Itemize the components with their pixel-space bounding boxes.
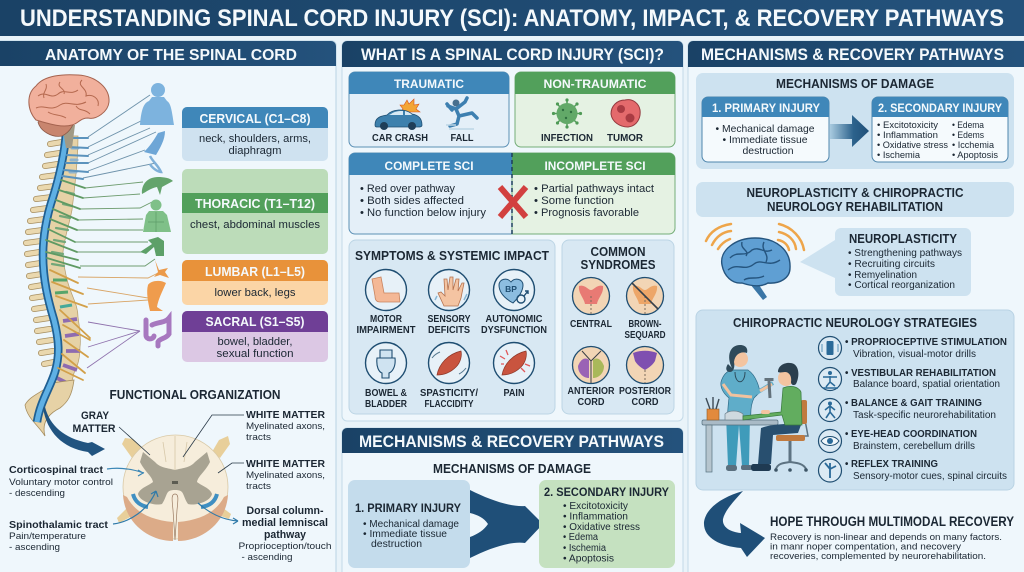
icon: shoulder, thoracic	[140, 237, 164, 256]
illustration: clinician and patient	[702, 345, 808, 472]
box: neuroplasticity and chiropractic neurology rehabilitation	[696, 182, 1014, 217]
icon: body, cervical	[140, 83, 174, 125]
list: complete SCI: • No function below injury	[360, 207, 486, 219]
box: symptoms and systemic impact: BLADDER	[365, 399, 408, 410]
subheading: mechanisms of damage: MECHANISMS OF DAMAGE	[433, 462, 591, 476]
card: secondary injury: • Edema	[563, 532, 598, 543]
card: secondary injury: • Icchemia	[952, 140, 995, 151]
sacrum	[25, 380, 74, 436]
icon: car crash	[375, 99, 422, 130]
box: cervical: diaphragm	[228, 145, 282, 157]
lower tan lobes	[123, 495, 173, 541]
card: primary injury: • Immediate tissue	[722, 134, 808, 146]
box: symptoms and systemic impact: AUTONOMIC	[486, 314, 542, 325]
box: sacral: bowel, bladder,	[218, 336, 292, 348]
box: thoracic: chest, abdominal muscles	[190, 219, 321, 231]
label: dorsal column-medial lemniscal pathway: Proprioception/touch	[238, 541, 332, 552]
label: dorsal column-medial lemniscal pathway: medial lemniscal	[242, 517, 328, 529]
card: primary injury: • Immediate tissue	[363, 529, 447, 540]
list: incomplete SCI	[534, 183, 654, 219]
desk	[702, 420, 778, 472]
gray matter	[138, 452, 212, 505]
card: non-traumatic: NON-TRAUMATIC	[544, 77, 647, 91]
card: primary injury: destruction	[371, 539, 422, 550]
reflex hammer	[764, 380, 774, 398]
list: complete SCI: • Both sides affected	[360, 195, 464, 207]
card: secondary injury	[872, 97, 1008, 162]
box: common syndromes: POSTERIOR	[619, 386, 672, 397]
icon: colon, sacral	[146, 318, 169, 346]
box: symptoms and systemic impact	[349, 240, 555, 414]
box: common syndromes: COMMON	[590, 245, 646, 259]
colored discs	[70, 148, 78, 172]
box: mechanisms of damage	[696, 73, 1014, 169]
box: common syndromes: BROWN-	[628, 319, 662, 330]
box: chiropractic neurology strategies	[696, 310, 1014, 490]
icon: blue brain	[722, 238, 790, 300]
card: secondary injury: • Apoptosis	[563, 554, 614, 564]
icon: red X	[500, 187, 526, 217]
icon: leg, lumbar	[147, 281, 166, 311]
model on desk	[725, 411, 743, 420]
box: symptoms and systemic impact: FLACCIDITY	[424, 399, 474, 410]
box: symptoms and systemic impact: BOWEL &	[365, 388, 407, 399]
icon: autonomic dysfunction: BP	[505, 284, 517, 294]
icon: sensory deficits	[428, 270, 470, 310]
brain	[29, 75, 109, 148]
heading: what is SCI	[342, 41, 683, 67]
arrow: spine to cross-section	[43, 407, 105, 456]
card: traumatic: TRAUMATIC	[394, 77, 464, 91]
icon: autonomic dysfunction	[494, 270, 534, 310]
panel: what is a spinal cord injury	[342, 41, 683, 421]
box: mechanisms of damage: MECHANISMS OF DAMAGE	[776, 77, 934, 91]
card: primary injury: destruction	[742, 145, 794, 157]
icon: pain	[494, 342, 534, 384]
label: corticospinal tract: Corticospinal tract	[9, 464, 103, 476]
patient	[743, 363, 802, 471]
label: white matter, lower: Myelinated axons,	[246, 470, 325, 481]
card: secondary injury: • Inflammation	[877, 130, 938, 141]
icon: hip, lumbar	[154, 260, 169, 278]
box: common syndromes: ANTERIOR	[568, 386, 615, 397]
spinous processes	[26, 142, 62, 364]
box: common syndromes: CENTRAL	[570, 319, 612, 330]
text: hope through multimodal recovery: in manr noper compentation, and necovery	[770, 542, 961, 552]
label: white matter, lower: WHITE MATTER	[246, 458, 325, 470]
callout: neuroplasticity: • Strengthening pathways	[848, 248, 962, 259]
box: symptoms and systemic impact: SPASTICITY/	[420, 388, 478, 399]
box: lumbar	[182, 260, 328, 305]
card: complete vs incomplete SCI	[349, 153, 675, 234]
spinal cord	[37, 133, 66, 422]
callout: neuroplasticity: • Cortical reorganization	[848, 280, 955, 291]
label: dorsal column-medial lemniscal pathway: Dorsal column-	[246, 505, 324, 517]
list: complete SCI	[360, 183, 486, 219]
label: spinothalamic tract	[9, 519, 108, 553]
callout: neuroplasticity: • Remyelination	[848, 270, 917, 281]
strategy: eye-head coordination	[818, 428, 977, 452]
box: sacral: sexual function	[216, 348, 294, 360]
box: symptoms and systemic impact: PAIN	[504, 388, 524, 399]
arrow: primary to secondary	[830, 115, 869, 147]
heading: mechanisms, right: MECHANISMS & RECOVERY PATHWAYS	[701, 45, 1004, 64]
card: secondary injury: • Edems	[952, 130, 984, 141]
card: traumatic: FALL	[450, 132, 474, 144]
label: corticospinal tract	[9, 464, 113, 499]
label: white matter, lower: tracts	[246, 481, 271, 492]
nerve roots	[62, 138, 88, 179]
box: neuroplasticity and chiropractic neurology rehabilitation: NEUROPLASTICITY & CHIROPRACTIC	[746, 186, 964, 200]
card: secondary injury: • Ischemia	[877, 150, 921, 161]
box: lumbar: LUMBAR (L1–L5)	[205, 265, 305, 279]
list: incomplete SCI: • Some function	[534, 195, 614, 207]
icon: signal arcs	[706, 224, 804, 250]
nerve root fans	[122, 438, 145, 458]
callout: neuroplasticity: NEUROPLASTICITY	[849, 231, 957, 246]
box: common syndromes: CORD	[578, 397, 604, 408]
card: secondary injury: • Excitotoxicity	[563, 501, 628, 512]
strategy: eye-head coordination: • EYE-HEAD COORDINATION	[845, 428, 977, 440]
icon: virus	[552, 98, 582, 129]
label: dorsal column-medial lemniscal pathway: - ascending	[242, 552, 292, 563]
illustration: spine and cord	[25, 133, 90, 436]
label: white matter, upper: tracts	[246, 432, 271, 443]
label: corticospinal tract: Voluntary motor control	[9, 477, 113, 488]
strategy: balance and gait training: • BALANCE & GAIT TRAINING	[845, 397, 982, 409]
strategy: proprioceptive stimulation: • PROPRIOCEPTIVE STIMULATION	[845, 336, 1007, 348]
box: common syndromes: CORD	[632, 397, 658, 408]
card: traumatic	[349, 72, 509, 147]
box: symptoms and systemic impact: SENSORY	[428, 314, 471, 325]
strategy: eye-head coordination: Brainstem, cerebellum drills	[853, 441, 975, 452]
text: hope through multimodal recovery: recoveries, complemented by neurorehabilitation.	[770, 551, 986, 562]
box: common syndromes	[562, 240, 674, 414]
box: symptoms and systemic impact: SYMPTOMS & SYSTEMIC IMPACT	[355, 249, 549, 263]
arrow: primary to secondary	[470, 490, 543, 558]
box: common syndromes: SEQUARD	[624, 330, 666, 341]
box: thoracic	[182, 169, 328, 254]
strategy: vestibular rehabilitation: • VESTIBULAR REHABILITATION	[845, 367, 996, 379]
strategy: proprioceptive stimulation: Vibration, visual-motor drills	[853, 349, 976, 360]
clinician	[721, 345, 773, 471]
strategy: reflex training	[818, 458, 1007, 482]
card: secondary injury: 2. SECONDARY INJURY	[544, 487, 669, 499]
icon: tumor	[611, 100, 640, 127]
text: hope through multimodal recovery	[770, 514, 1014, 562]
diagram: spinal cord cross-section	[117, 435, 231, 541]
strategy: reflex training: • REFLEX TRAINING	[845, 458, 938, 470]
box: thoracic: THORACIC (T1–T12)	[195, 197, 315, 211]
card: secondary injury: • Oxidative stress	[877, 140, 948, 151]
card: primary injury	[702, 97, 829, 162]
box: symptoms and systemic impact: DYSFUNCTION	[481, 325, 547, 336]
card: primary injury: 1. PRIMARY INJURY	[355, 503, 461, 515]
label: white matter, upper	[246, 409, 325, 443]
pen cup	[706, 397, 719, 420]
card: complete vs incomplete SCI: COMPLETE SCI	[384, 159, 474, 173]
card: primary injury	[348, 480, 470, 568]
box: cervical: CERVICAL (C1–C8)	[200, 112, 310, 126]
label: spinothalamic tract: Pain/temperature	[9, 531, 86, 542]
panel: mechanisms and recovery pathways, right	[688, 41, 1024, 572]
label: gray matter	[72, 410, 116, 435]
icon: central syndrome	[572, 278, 610, 314]
vertebral bodies	[44, 136, 80, 394]
box: chiropractic neurology strategies: CHIROPRACTIC NEUROLOGY STRATEGIES	[733, 316, 977, 330]
label: dorsal column-medial lemniscal pathway: pathway	[264, 529, 307, 541]
arrow: curved to hope	[704, 491, 765, 557]
chair	[774, 400, 808, 472]
icon: bowel and bladder	[366, 342, 406, 384]
nerve lines to body regions	[75, 95, 160, 368]
card: primary injury: 1. PRIMARY INJURY	[712, 101, 820, 115]
card: secondary injury: • Excitotoxicity	[877, 120, 938, 131]
card: non-traumatic: INFECTION	[541, 132, 593, 144]
label: white matter, upper: Myelinated axons,	[246, 421, 325, 432]
card: secondary injury: 2. SECONDARY INJURY	[878, 101, 1002, 115]
icon: torso, thoracic	[143, 200, 171, 232]
strategy: balance and gait training	[818, 397, 996, 422]
heading: anatomy: ANATOMY OF THE SPINAL CORD	[45, 47, 297, 64]
label: corticospinal tract: - descending	[9, 488, 65, 499]
card: complete vs incomplete SCI: INCOMPLETE SCI	[544, 159, 646, 173]
heading: anatomy	[0, 41, 336, 66]
text: hope through multimodal recovery: Recovery is non-linear and depends on many factors.	[770, 532, 1002, 543]
icon: motor impairment	[366, 270, 406, 310]
heading: functional organization: FUNCTIONAL ORGANIZATION	[110, 388, 280, 402]
label: gray matter: MATTER	[72, 423, 116, 435]
icon: brown-sequard syndrome	[626, 278, 664, 314]
box: neuroplasticity and chiropractic neurology rehabilitation: NEUROLOGY REHABILITATION	[767, 200, 943, 214]
card: non-traumatic: TUMOR	[607, 132, 643, 144]
box: cervical	[182, 107, 328, 161]
icon: falling person	[446, 98, 477, 129]
list: incomplete SCI: • Prognosis favorable	[534, 207, 639, 219]
card: secondary injury: • Inflammation	[563, 512, 628, 522]
card: secondary injury: • Edema	[952, 120, 985, 131]
label: white matter, upper: WHITE MATTER	[246, 409, 325, 421]
icon: liver, thoracic	[142, 177, 173, 195]
card: traumatic: CAR CRASH	[372, 132, 428, 144]
list: complete SCI: • Red over pathway	[360, 183, 455, 195]
box: symptoms and systemic impact: MOTOR	[370, 314, 403, 325]
card: primary injury: • Mechanical damage	[716, 123, 815, 135]
label: gray matter: GRAY	[81, 410, 110, 422]
icon: posterior cord syndrome	[626, 346, 664, 384]
box: symptoms and systemic impact: IMPAIRMENT	[356, 325, 416, 336]
strategy: vestibular rehabilitation	[818, 367, 1000, 390]
list: incomplete SCI: • Partial pathways intact	[534, 183, 654, 195]
box: sacral	[182, 311, 328, 362]
card: secondary injury: • Oxidative stress	[563, 522, 640, 533]
box: lumbar: lower back, legs	[214, 287, 296, 299]
strategy: reflex training: Sensory-motor cues, spinal circuits	[853, 471, 1007, 482]
label lines and tract arrows	[107, 415, 244, 524]
card: secondary injury	[539, 480, 675, 568]
box: common syndromes: SYNDROMES	[580, 258, 656, 272]
box: sacral: SACRAL (S1–S5)	[206, 315, 304, 329]
icon: arm, cervical	[144, 131, 165, 172]
card: primary injury: • Mechanical damage	[363, 519, 459, 530]
strategy: balance and gait training: Task-specific neurorehabilitation	[853, 410, 996, 421]
box: symptoms and systemic impact: DEFICITS	[428, 325, 470, 336]
card: secondary injury: • Apoptosis	[952, 150, 998, 161]
icon: anterior cord syndrome	[572, 346, 610, 384]
label: white matter, lower	[246, 458, 325, 492]
callout: neuroplasticity	[800, 228, 971, 296]
label: dorsal column-medial lemniscal pathway	[238, 505, 332, 563]
strategy: vestibular rehabilitation: Balance board, spatial orientation	[853, 379, 1000, 390]
label: spinothalamic tract: - ascending	[9, 542, 60, 553]
heading: what is SCI: WHAT IS A SPINAL CORD INJURY (SCI)?	[361, 45, 664, 64]
callout: neuroplasticity: • Recruiting circuits	[848, 259, 935, 270]
box: cervical: neck, shoulders, arms,	[199, 133, 311, 145]
icon: spasticity	[428, 342, 470, 384]
panel: anatomy of the spinal cord	[0, 41, 336, 572]
label: spinothalamic tract: Spinothalamic tract	[9, 519, 108, 531]
strategy: proprioceptive stimulation	[818, 336, 1007, 360]
card: secondary injury: • Ischemia	[563, 543, 606, 554]
heading: mechanisms, middle: MECHANISMS & RECOVERY PATHWAYS	[359, 432, 664, 451]
panel: mechanisms and recovery pathways, middle	[342, 428, 683, 572]
card: non-traumatic	[515, 72, 675, 147]
